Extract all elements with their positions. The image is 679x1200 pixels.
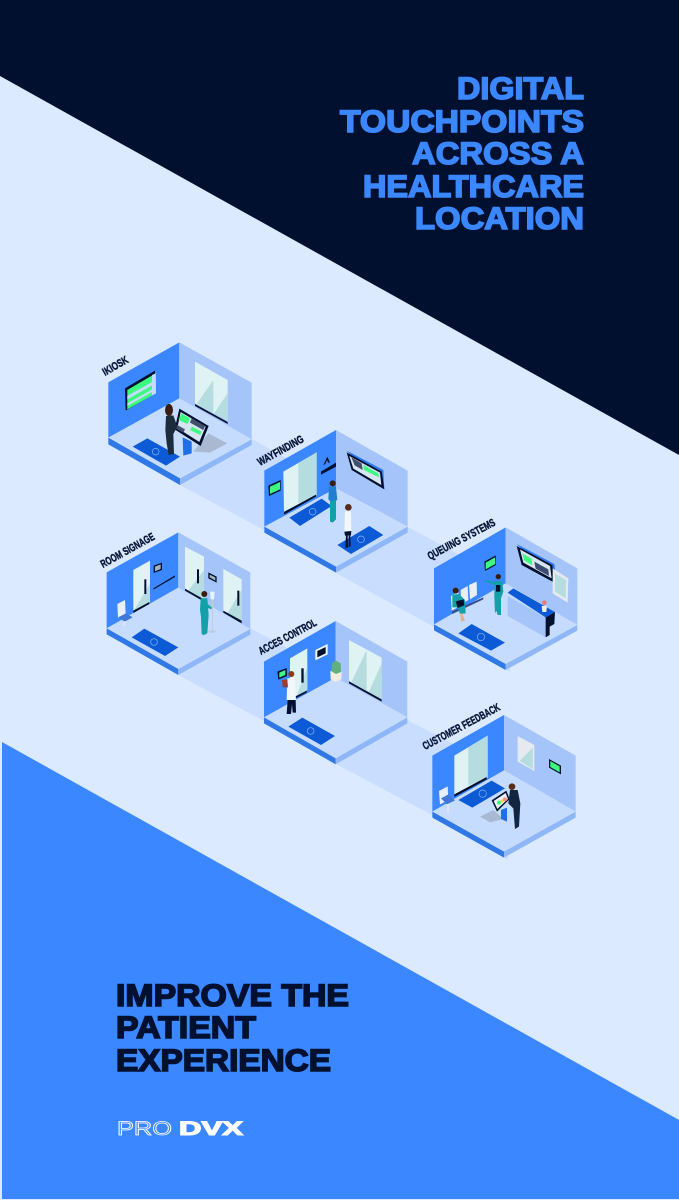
room: queuing systems [434, 527, 577, 670]
title: TOUCHPOINTS [340, 103, 584, 139]
logo: DVX [179, 1119, 244, 1140]
title: ACROSS A [412, 135, 584, 171]
bottom heading: PATIENT [116, 1009, 256, 1045]
room: kiosk [108, 342, 252, 485]
title [340, 70, 584, 236]
title: HEALTHCARE [363, 168, 584, 204]
room: access control [264, 621, 407, 764]
room: wayfinding [264, 430, 408, 573]
title: DIGITAL [457, 70, 584, 106]
bottom heading: IMPROVE THE [116, 977, 349, 1013]
room: customer feedback [432, 715, 576, 858]
label: wayfinding: WAYFINDING [256, 433, 306, 469]
label: customer feedback: CUSTOMER FEEDBACK [421, 702, 502, 753]
blue bottom band [2, 742, 679, 1199]
room: room signage [107, 532, 250, 675]
logo [117, 1119, 244, 1140]
label: kiosk: IKIOSK [100, 354, 131, 379]
label: queuing systems: QUEUING SYSTEMS [426, 517, 498, 563]
label: room signage: ROOM SIGNAGE [99, 531, 157, 571]
bottom heading: EXPERIENCE [116, 1042, 331, 1078]
label: access control: ACCES CONTROL [257, 617, 319, 658]
logo: PRO [117, 1119, 172, 1140]
floor connectors [178, 439, 510, 860]
title: LOCATION [415, 200, 584, 236]
bottom heading [116, 977, 349, 1078]
navy top band [0, 0, 679, 455]
